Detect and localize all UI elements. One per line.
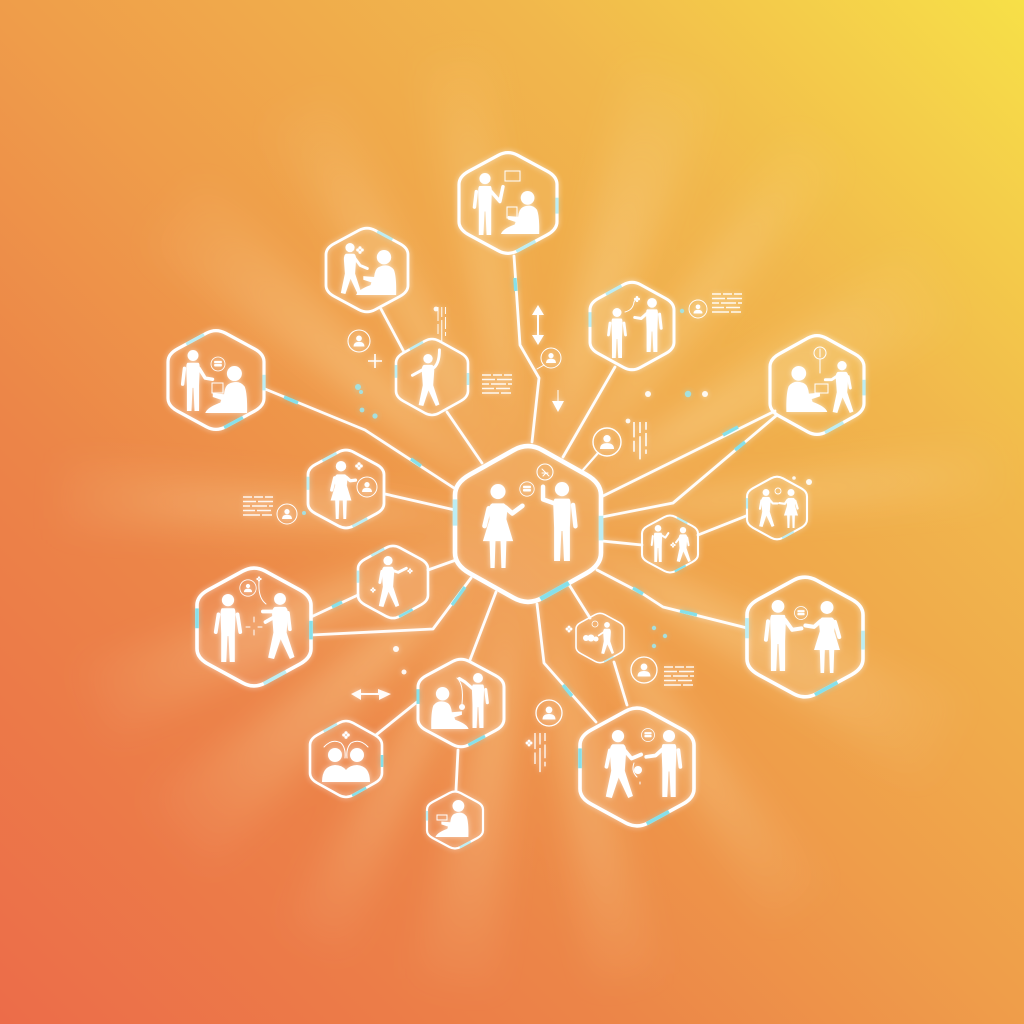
badge icon: [537, 464, 553, 480]
connector: lower-left small node: [428, 560, 456, 570]
connector: bottom node to centre: [470, 592, 496, 660]
user badge: lower centre: [536, 700, 562, 726]
connector: lower-left large node to small node: [311, 595, 358, 617]
connector: small right node to far right node: [698, 516, 746, 535]
node: dancer: [396, 339, 468, 415]
node: bottom small, seated reader: [427, 792, 483, 848]
node: right large lower, man and woman: [747, 577, 863, 697]
connector: bottom nodes: [456, 750, 458, 790]
person: man raising hand: [543, 482, 575, 561]
text lines: left: [243, 497, 273, 515]
connector: bottom-left pair: [376, 702, 417, 735]
connector: right large lower node: [597, 570, 747, 628]
connector: right upper node, upper branch: [603, 411, 775, 496]
node: upper right, two men: [590, 282, 674, 370]
vertical lines: right of centre: [634, 422, 646, 459]
node: lower-left small, walking person: [358, 546, 428, 618]
connector: small right node to centre: [602, 541, 642, 545]
connector: left middle node: [385, 494, 455, 510]
floating annotations: badges, text lines, arrows and dots: [243, 294, 812, 772]
user badge: lower right: [631, 657, 657, 683]
connector: left large node: [265, 389, 454, 488]
arrow: horizontal double: [351, 689, 391, 700]
connector: centre to tiny node: [568, 583, 590, 618]
connector: lower-left large node to centre: [311, 578, 471, 635]
arrow: down: [552, 390, 564, 412]
node: lower large, two men with bubble: [580, 708, 694, 826]
small flower icon: [526, 740, 532, 746]
plus sign: [368, 354, 382, 368]
node: top, presenter and seated person: [459, 153, 557, 253]
connector: centre to user badge: [583, 453, 598, 470]
node: left large, consultation: [168, 331, 264, 429]
vertical lines: above dancer: [438, 307, 446, 341]
node: lower-left, two heads with arcs: [310, 721, 382, 797]
user badge: right of centre: [593, 428, 621, 456]
vertical lines: lower centre: [535, 733, 545, 772]
dots: [302, 307, 812, 674]
node: left middle, woman with user badge: [308, 450, 384, 528]
connector: dancer to centre: [447, 412, 482, 463]
node: tiny, person with cloud: [566, 613, 624, 663]
node: lower-left large, two men with sparks: [197, 568, 311, 686]
connector: lower large node to centre: [537, 604, 596, 722]
node: bottom, man and seated person: [418, 659, 504, 747]
node: small right, two people: [642, 516, 698, 572]
text lines: near dancer: [482, 375, 512, 393]
connector: upper-right node: [563, 367, 615, 457]
user badge: under top line: [537, 348, 561, 369]
connector: top node: [514, 256, 539, 442]
text lines: lower right: [664, 667, 694, 685]
hexagon network diagram: [168, 153, 864, 848]
node: right upper, seated person and walker: [770, 336, 864, 434]
speech bubble: [520, 482, 534, 496]
node: upper-left, helper and seated person: [326, 228, 408, 312]
text lines: upper right: [712, 294, 742, 312]
connector lines: [265, 256, 777, 790]
person: woman: [483, 484, 522, 568]
node: central hexagon with two people talking: [455, 446, 601, 602]
node: far right small, two people shaking hands: [747, 477, 807, 539]
connector: upper-left node to dancer: [381, 309, 404, 352]
connector: tiny node to lower large node: [614, 662, 627, 705]
user badge: left: [277, 504, 297, 524]
user badge: upper right: [689, 300, 707, 318]
user badge: upper left: [348, 330, 370, 352]
connector: right upper node, lower branch: [602, 415, 777, 517]
arrow: vertical double: [532, 305, 544, 345]
